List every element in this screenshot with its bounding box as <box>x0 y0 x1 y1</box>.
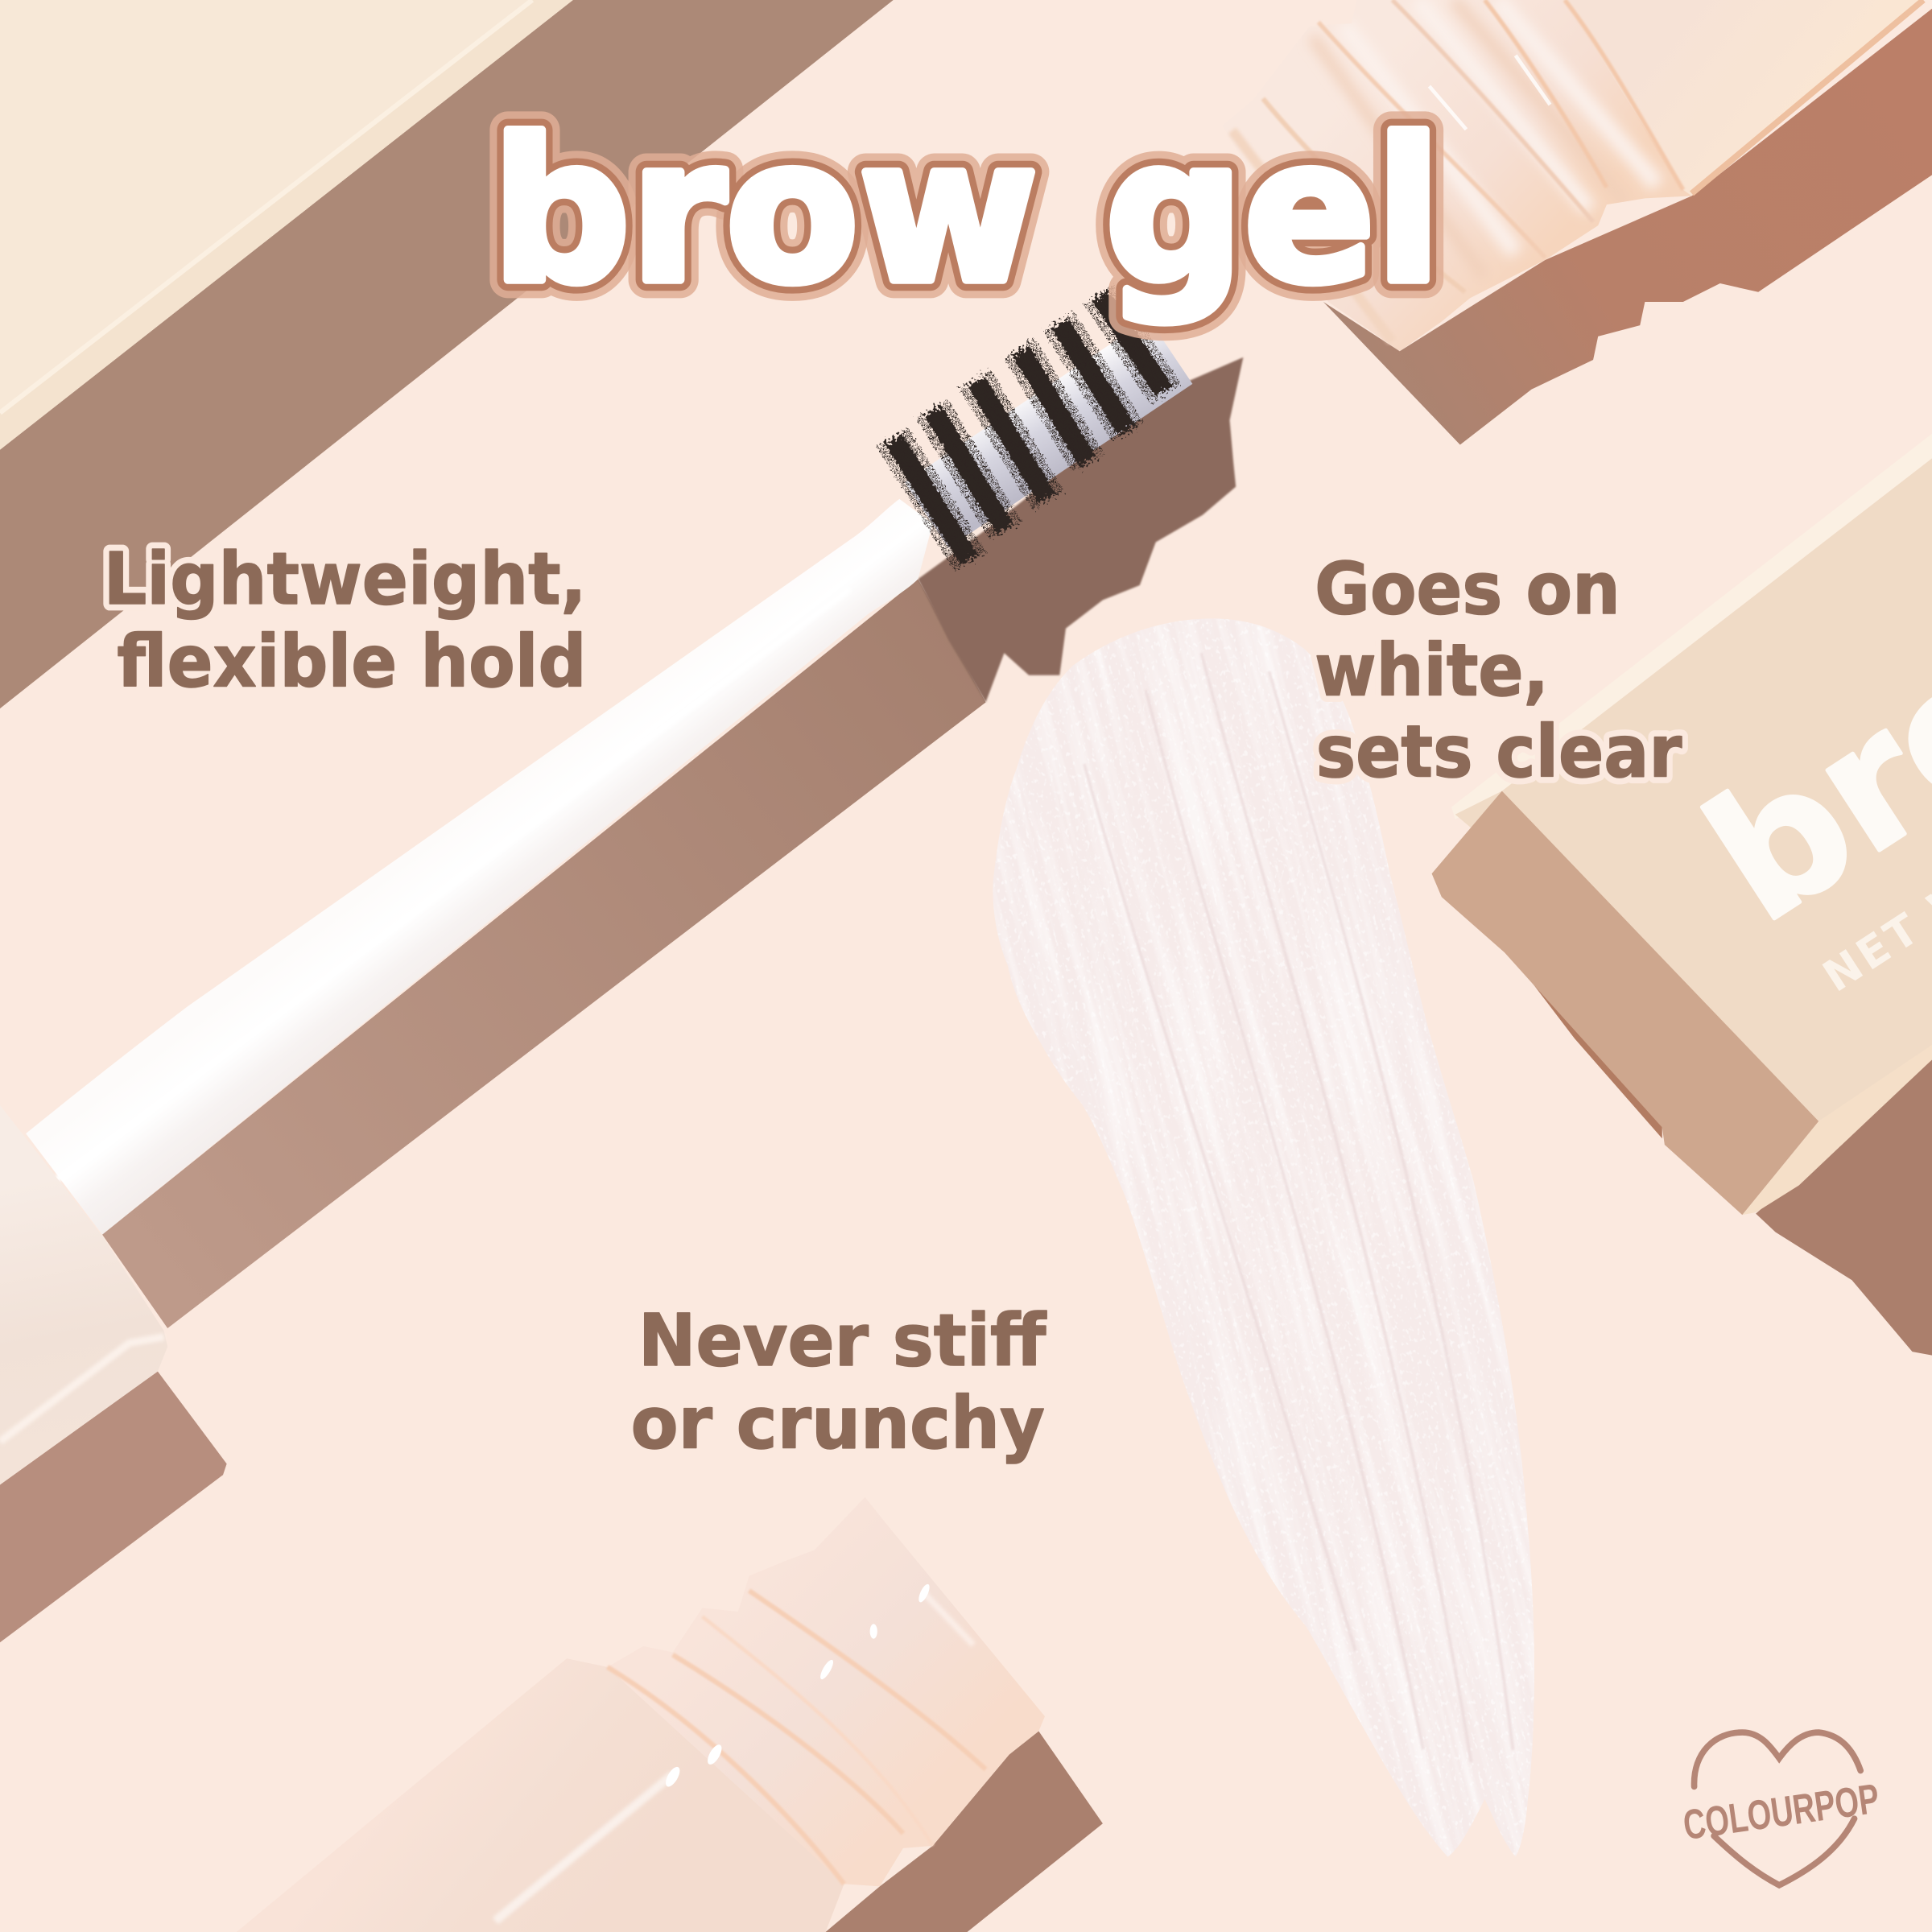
top-right tube neck with shadow <box>1222 0 1932 445</box>
wand: white applicator stem <box>26 499 933 1235</box>
bottom tube neck with shadow <box>237 1497 1103 1932</box>
title: brow gel <box>492 97 1442 326</box>
product swatch <box>993 618 1534 1856</box>
callout: goes on white, sets clear <box>1315 547 1682 793</box>
wand shadow <box>102 357 1243 1328</box>
callout: goes on white, sets clear: sets clear <box>1316 710 1682 793</box>
callout: goes on white, sets clear: white, <box>1315 629 1549 712</box>
callout: goes on white, sets clear: white, <box>1315 629 1549 712</box>
bottom-left cap shadow <box>0 1372 227 1642</box>
printed product name on cap <box>1700 697 1932 991</box>
callout: never stiff or crunchy <box>631 1299 1047 1464</box>
bottom-left cap <box>0 1105 167 1484</box>
callout: lightweight, flexible hold: flexible hold <box>117 621 587 704</box>
title: brow gel <box>492 97 1442 326</box>
callout: goes on white, sets clear: Goes on <box>1315 547 1620 630</box>
right tube cap <box>1432 434 1932 1356</box>
callout: lightweight, flexible hold <box>104 538 587 704</box>
callout: never stiff or crunchy: or crunchy <box>631 1381 1045 1464</box>
callout: lightweight, flexible hold: Lightweight, <box>104 538 587 621</box>
title: brow gel <box>492 97 1442 326</box>
callout: goes on white, sets clear: Goes on <box>1315 547 1620 630</box>
callout: lightweight, flexible hold: Lightweight, <box>104 538 587 621</box>
logo: ColourPop heart <box>1680 1732 1882 1885</box>
callout: never stiff or crunchy: Never stiff <box>638 1299 1047 1382</box>
top-left tube with shadow <box>0 0 894 708</box>
wand: spoolie brush <box>894 295 1170 560</box>
callout: goes on white, sets clear: sets clear <box>1316 710 1682 793</box>
